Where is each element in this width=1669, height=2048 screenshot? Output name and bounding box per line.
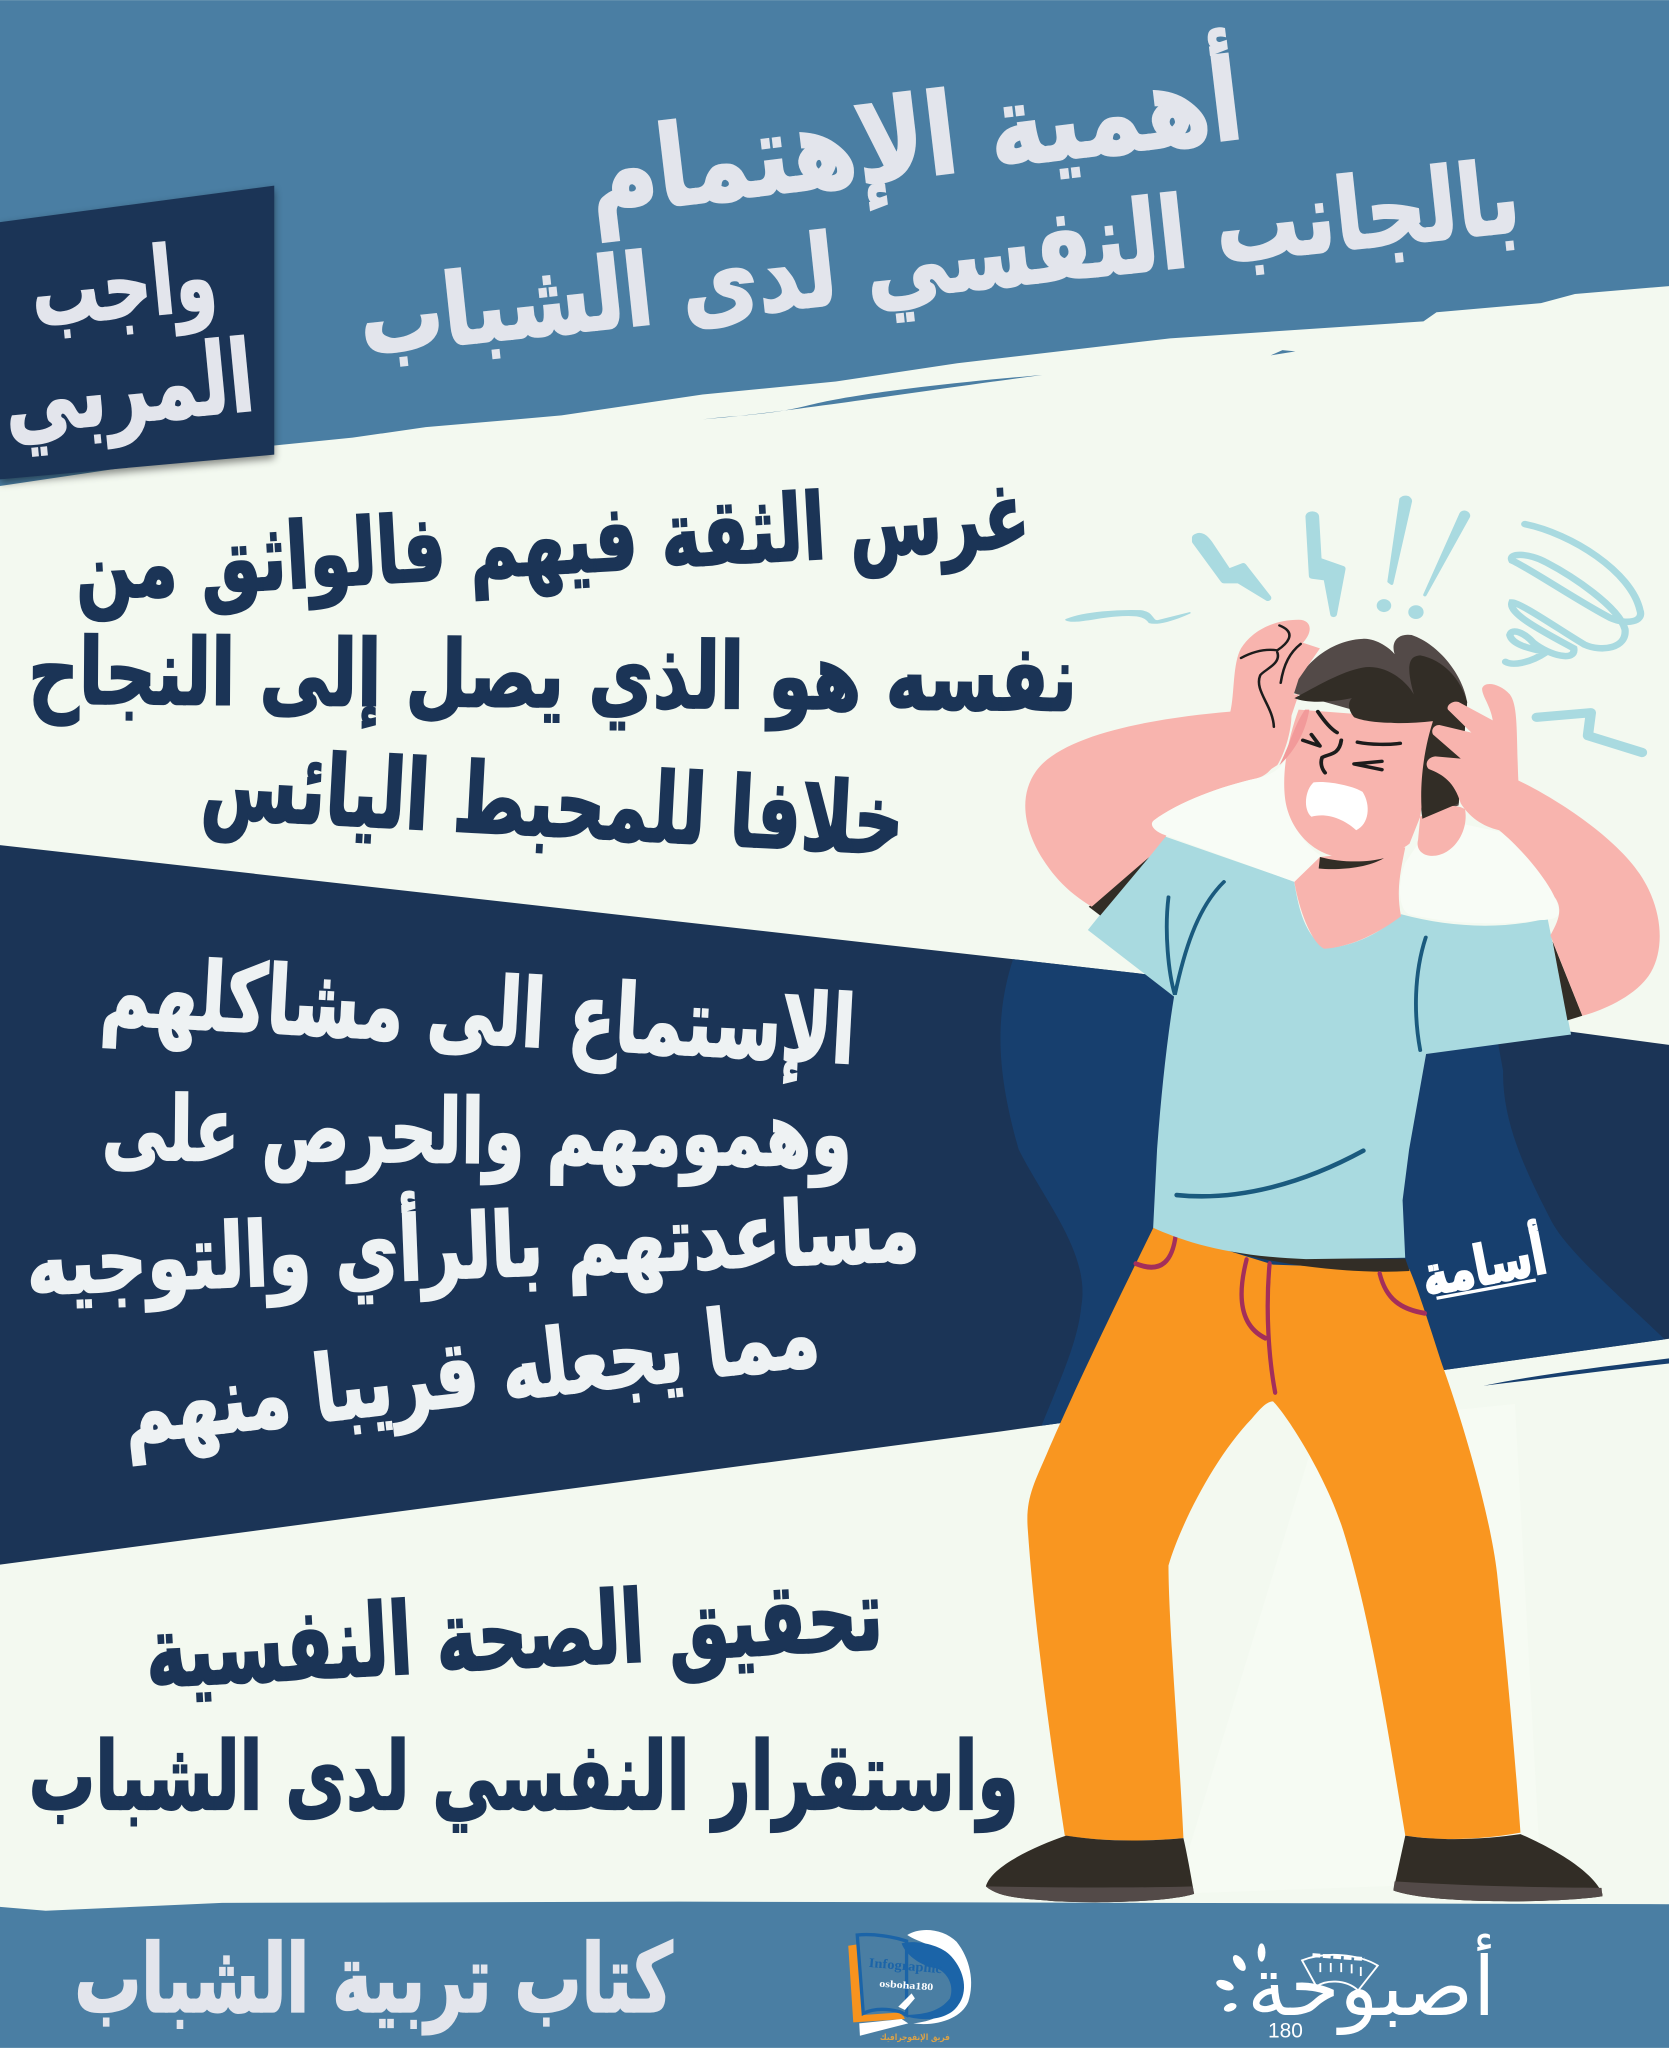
title: أهمية الإهتمام xyxy=(580,26,1249,243)
stroke sliver on right xyxy=(1484,1358,1669,1386)
text block: instill confidence: نفسه هو الذي يصل إلى النجاح xyxy=(28,618,1077,733)
hair back xyxy=(1291,635,1467,819)
chin shadow xyxy=(1319,857,1384,869)
left shoe xyxy=(986,1836,1194,1902)
blue blob behind figure xyxy=(1000,959,1665,1426)
signature: أسامة xyxy=(1415,1218,1551,1309)
lower body xyxy=(986,1227,1602,1902)
facial features xyxy=(1303,712,1400,773)
exclamation marks xyxy=(1378,497,1469,617)
right shoe xyxy=(1393,1834,1602,1901)
footer logo: osboha 180: أصبوحة xyxy=(1247,1933,1495,2035)
mouth xyxy=(1306,782,1368,830)
hair wisps in fingers xyxy=(1241,625,1301,727)
left hand xyxy=(1230,620,1320,779)
tag: teacher's duty: المربي xyxy=(0,319,259,459)
text block: listening to problems: مما يجعله قريبا منهم xyxy=(117,1280,824,1467)
hair xyxy=(1294,655,1467,819)
header band xyxy=(0,0,1669,486)
neck xyxy=(1294,847,1405,949)
text block: listening to problems: الإستماع الى مشاكلهم xyxy=(99,938,858,1087)
tag: teacher's duty: واجب xyxy=(26,223,221,349)
footer logo: infographic team: فريق الإنفوجرافيك xyxy=(880,2033,950,2043)
shirt creases xyxy=(1167,882,1426,1050)
tag: teacher's duty xyxy=(0,186,274,479)
pants xyxy=(1027,1227,1520,1840)
title xyxy=(353,26,1525,378)
temple flush xyxy=(1279,710,1309,765)
rays xyxy=(1215,1943,1265,2013)
squiggle right xyxy=(1537,713,1642,753)
dizzy spiral xyxy=(1506,524,1641,664)
text block: instill confidence: خلافا للمحبط اليائس xyxy=(199,728,907,877)
book xyxy=(848,1944,905,2022)
shirt fold xyxy=(1177,1151,1363,1196)
lightning bolt left xyxy=(1195,536,1268,598)
white gap right of neck xyxy=(1400,824,1559,923)
text block: mental health: واستقرار النفسي لدى الشباب xyxy=(29,1723,1019,1832)
footer logo: infographic team: osboha180 xyxy=(879,1979,934,1993)
number 180: 180 xyxy=(1268,2019,1303,2042)
text block: listening to problems xyxy=(24,938,921,1467)
face xyxy=(1284,710,1433,859)
left arm xyxy=(1025,694,1299,907)
stress marks xyxy=(1066,497,1469,623)
ear xyxy=(1418,806,1466,856)
footer band xyxy=(0,1902,1669,2048)
text block: listening to problems: مساعدتهم بالرأي والتوجيه xyxy=(24,1172,921,1316)
lightning bolt centre xyxy=(1309,514,1342,614)
navy band xyxy=(0,845,1669,1565)
building icon xyxy=(1302,1955,1378,1990)
t-shirt xyxy=(1088,836,1571,1259)
text block: listening to problems: وهمومهم والحرص على xyxy=(102,1077,852,1188)
white gap left of neck xyxy=(1152,756,1320,883)
character: stressed man xyxy=(986,497,1660,1902)
belt xyxy=(1200,1242,1410,1272)
right hand and forearm xyxy=(1427,684,1660,1016)
footer logo: osboha 180 xyxy=(1215,1933,1495,2042)
pocket and seam lines xyxy=(1136,1235,1425,1392)
text block: instill confidence xyxy=(28,462,1077,877)
header torn slivers xyxy=(703,316,1383,419)
text block: instill confidence: غرس الثقة فيهم فالواثق من xyxy=(72,462,1032,623)
sleeve shadows xyxy=(1089,857,1582,1020)
squiggle left xyxy=(1066,611,1190,623)
footer title: كتاب تربية الشباب xyxy=(74,1925,673,2034)
footer logo: infographic team xyxy=(848,1930,971,2043)
text block: mental health: تحقيق الصحة النفسية xyxy=(143,1558,886,1712)
wave xyxy=(907,1930,971,2024)
logo labels: Infographic xyxy=(868,1955,943,1976)
text block: mental health xyxy=(29,1558,1019,1832)
